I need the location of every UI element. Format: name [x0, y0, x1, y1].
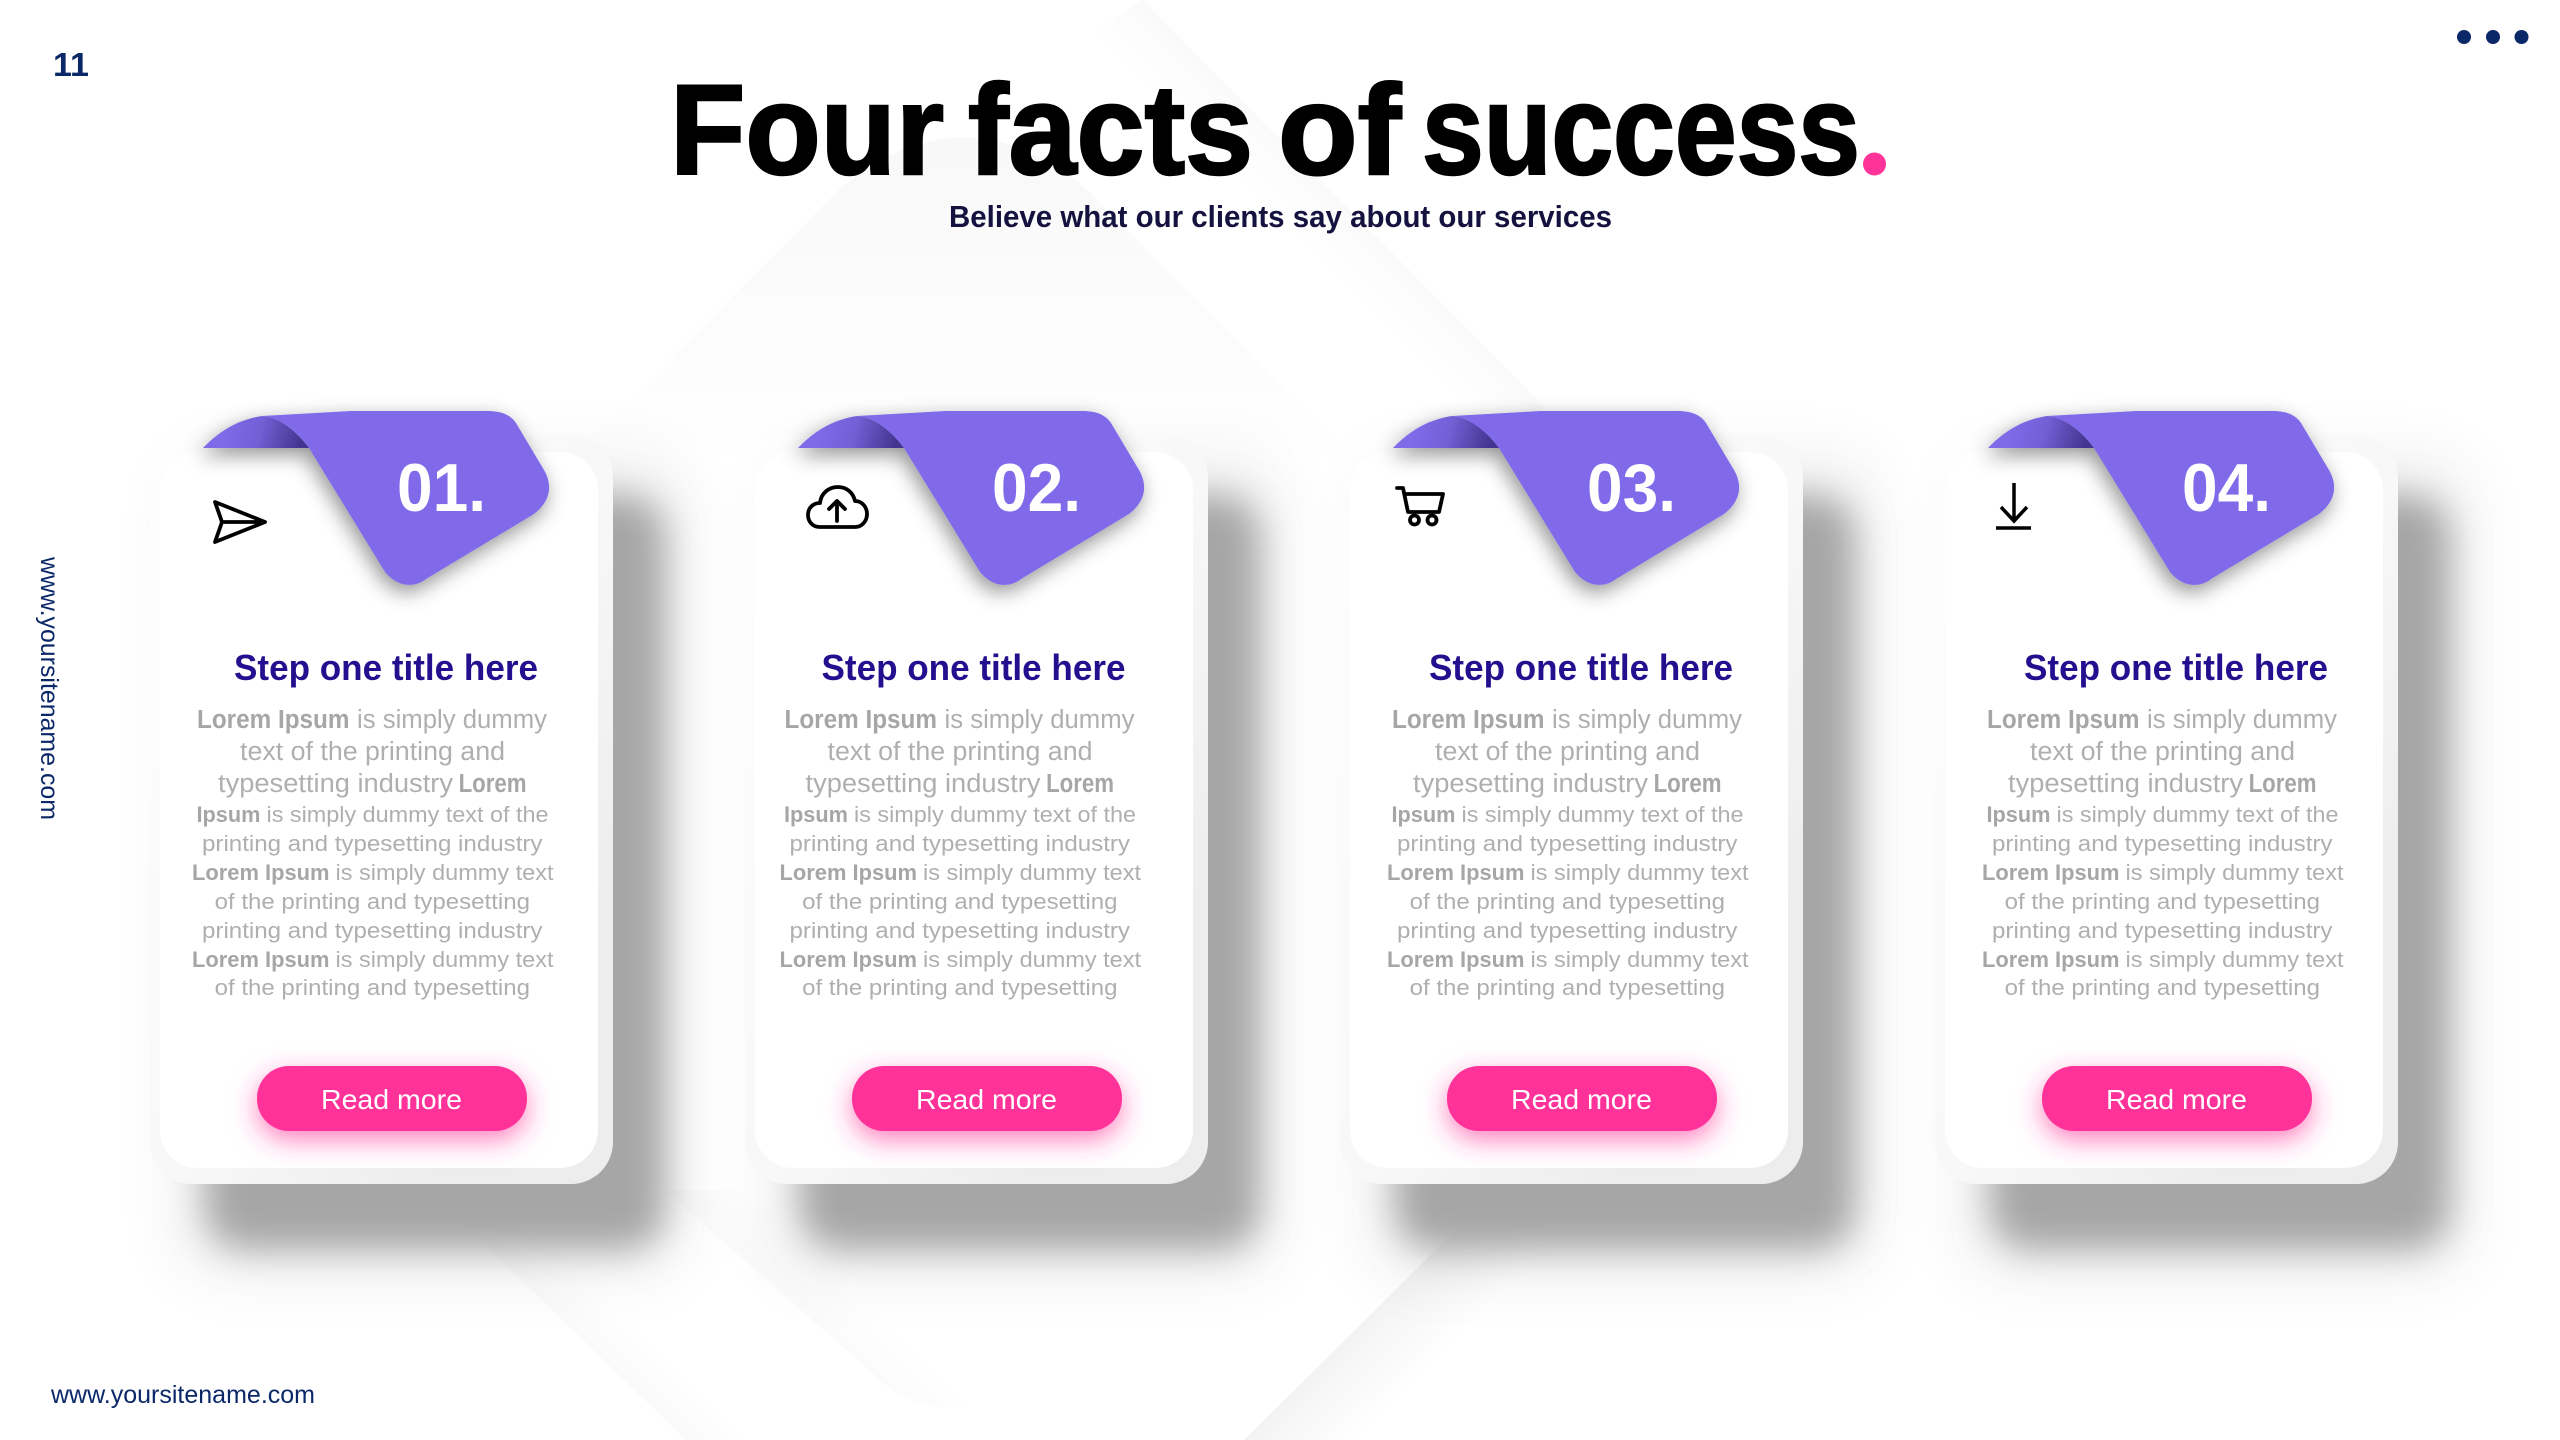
number 01: 01. — [397, 450, 486, 526]
body text: Ipsum — [1986, 802, 2050, 827]
body text: Lorem Ipsum — [197, 706, 350, 734]
number 02: 02. — [992, 450, 1081, 526]
button: read more — [1447, 1066, 1717, 1131]
body text: printing and typesetting industry — [790, 918, 1130, 943]
button: read more — [257, 1066, 527, 1131]
panel: card 4 — [1935, 411, 2475, 1280]
body text: is simply dummy text — [1530, 860, 1748, 885]
icon: cloud upload — [808, 487, 867, 527]
body text: Lorem Ipsum — [192, 947, 330, 972]
subtitle: Believe what our clients say about our services — [949, 199, 1612, 234]
step title: Step one title here — [1429, 647, 1733, 688]
body text — [1982, 706, 2344, 1000]
button: read more: Read more — [321, 1084, 462, 1115]
body text: typesetting industry — [1413, 770, 1648, 798]
body text: Lorem Ipsum — [1392, 706, 1544, 734]
tab: purple folded ribbon 02 — [798, 411, 1144, 585]
body text: is simply dummy text — [1530, 947, 1748, 972]
body text: text of the printing and — [2030, 738, 2295, 766]
body text: text of the printing and — [828, 738, 1092, 766]
button: read more: Read more — [916, 1084, 1057, 1115]
body text: typesetting industry — [806, 770, 1041, 798]
body text: of the printing and typesetting — [802, 975, 1118, 1000]
body text: Lorem Ipsum — [1987, 706, 2140, 734]
body text: typesetting industry — [2008, 770, 2243, 798]
body text: is simply dummy text — [923, 860, 1141, 885]
body text: Lorem Ipsum — [192, 860, 330, 885]
number 03: 03. — [1587, 450, 1676, 526]
body text: Lorem Ipsum — [1982, 947, 2120, 972]
number 04: 04. — [2182, 450, 2271, 526]
body text: printing and typesetting industry — [790, 831, 1130, 856]
body text: typesetting industry — [218, 770, 453, 798]
panel: card 1 — [150, 411, 690, 1280]
body text: printing and typesetting industry — [1992, 831, 2332, 856]
panel: card 3 — [1340, 411, 1880, 1280]
body text: Lorem Ipsum — [1982, 860, 2120, 885]
title: success — [1422, 59, 1860, 202]
body text — [1387, 706, 1748, 1000]
body text: is simply dummy text — [336, 947, 554, 972]
body text: of the printing and typesetting — [215, 889, 530, 914]
body text: is simply dummy text of the — [2056, 802, 2338, 827]
body text: text of the printing and — [1435, 738, 1700, 766]
page number: 11 — [53, 46, 89, 83]
body text: is simply dummy — [2147, 706, 2337, 734]
body text: Lorem Ipsum — [1387, 860, 1524, 885]
body text: is simply dummy text — [336, 860, 554, 885]
body text: Ipsum — [784, 802, 848, 827]
step title: Step one title here — [822, 647, 1126, 688]
body text: is simply dummy text of the — [854, 802, 1136, 827]
menu dots — [2457, 30, 2528, 44]
body text: of the printing and typesetting — [1410, 889, 1725, 914]
title: of — [1278, 59, 1401, 202]
body text: is simply dummy text of the — [1462, 802, 1744, 827]
body text: printing and typesetting industry — [1992, 918, 2332, 943]
tab: purple folded ribbon 01 — [203, 411, 549, 585]
footer website text: www.yoursitename.com — [50, 1381, 315, 1409]
background: faint diamond shapes — [425, 0, 1565, 1440]
body text: Lorem — [1046, 770, 1114, 798]
side website text: www.yoursitename.com — [35, 556, 63, 820]
tab: purple folded ribbon 03 — [1393, 411, 1739, 585]
body text: printing and typesetting industry — [202, 918, 542, 943]
panel: card 2 — [745, 411, 1285, 1280]
body text: Ipsum — [196, 802, 260, 827]
tab: purple folded ribbon 04 — [1988, 411, 2334, 585]
title: facts — [968, 59, 1253, 202]
body text: is simply dummy text — [2126, 860, 2344, 885]
title — [670, 59, 1886, 202]
body text: is simply dummy text — [923, 947, 1141, 972]
icon: download arrow — [1996, 483, 2031, 528]
icon: paper plane — [215, 502, 265, 542]
body text: printing and typesetting industry — [1397, 831, 1738, 856]
body text: printing and typesetting industry — [202, 831, 542, 856]
body text: Lorem Ipsum — [780, 947, 917, 972]
body text: of the printing and typesetting — [2005, 889, 2320, 914]
body text: of the printing and typesetting — [1410, 975, 1725, 1000]
title: Four — [670, 59, 944, 202]
step title: Step one title here — [234, 647, 538, 688]
button: read more — [2042, 1066, 2312, 1131]
body text: of the printing and typesetting — [2005, 975, 2320, 1000]
body text: printing and typesetting industry — [1397, 918, 1738, 943]
body text: text of the printing and — [240, 738, 505, 766]
button: read more: Read more — [2106, 1084, 2247, 1115]
body text: Lorem Ipsum — [784, 706, 937, 734]
body text: Lorem Ipsum — [1387, 947, 1524, 972]
button: read more: Read more — [1511, 1084, 1652, 1115]
icon: shopping cart — [1397, 488, 1443, 524]
body text: of the printing and typesetting — [215, 975, 530, 1000]
body text: is simply dummy text — [2126, 947, 2344, 972]
body text: Lorem — [2249, 770, 2317, 798]
body text: Ipsum — [1392, 802, 1456, 827]
body text: is simply dummy — [357, 706, 547, 734]
body text — [192, 706, 554, 1000]
body text: Lorem — [1654, 770, 1722, 798]
button: read more — [852, 1066, 1122, 1131]
body text: Lorem Ipsum — [780, 860, 917, 885]
body text: is simply dummy text of the — [266, 802, 548, 827]
body text: Lorem — [459, 770, 527, 798]
body text — [780, 706, 1141, 1000]
body text: is simply dummy — [944, 706, 1135, 734]
step title: Step one title here — [2024, 647, 2328, 688]
body text: is simply dummy — [1552, 706, 1742, 734]
body text: of the printing and typesetting — [802, 889, 1118, 914]
